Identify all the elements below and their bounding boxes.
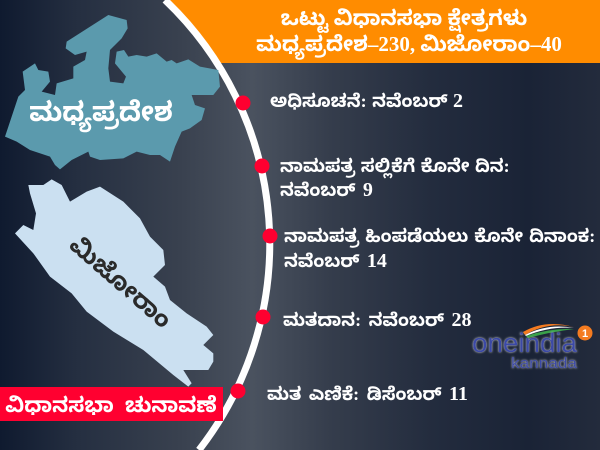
timeline item 3: withdrawal deadline: ನಾಮಪತ್ರ ಹಿಂಪಡೆಯಲು ಕೊನೇ ದಿನಾಂಕ: xyxy=(284,226,595,248)
orange header panel xyxy=(165,0,600,63)
logo: oneindia kannada xyxy=(472,324,592,372)
logo sub-wordmark: kannada xyxy=(511,355,578,372)
header text: ಒಟ್ಟು ವಿಧಾನಸಭಾ ಕ್ಷೇತ್ರಗಳು xyxy=(281,6,527,33)
timeline arc xyxy=(165,0,270,450)
label: Mizoram: ಮಿಜೋರಾಂ xyxy=(64,232,176,334)
timeline item 3: withdrawal deadline xyxy=(262,226,595,272)
timeline item 2: nomination deadline: ನಾಮಪತ್ರ ಸಲ್ಲಿಕೆಗೆ ಕೊನೇ ದಿನ: xyxy=(280,156,510,179)
timeline item 2: nomination deadline: ನವೆಂಬರ್ 9 xyxy=(280,179,373,201)
logo swoosh xyxy=(523,324,574,338)
timeline item 3: withdrawal deadline: ನವೆಂಬರ್ 14 xyxy=(284,250,387,272)
map: Mizoram xyxy=(15,179,213,387)
timeline item 2: nomination deadline xyxy=(254,156,510,201)
label: Madhya Pradesh: ಮಧ್ಯಪ್ರದೇಶ xyxy=(29,97,173,133)
timeline item 5: counting: ಮತ ಎಣಿಕೆ: ಡಿಸೆಂಬರ್ 11 xyxy=(267,383,468,405)
timeline item 4: voting: ಮತದಾನ: ನವೆಂಬರ್ 28 xyxy=(283,309,471,331)
logo badge: 1 xyxy=(582,328,588,340)
red banner: assembly election xyxy=(0,387,223,421)
red banner: assembly election: ವಿಧಾನಸಭಾ ಚುನಾವಣೆ xyxy=(5,393,217,417)
header text xyxy=(256,6,562,60)
header text: ಮಧ್ಯಪ್ರದೇಶ–230, ಮಿಜೋರಾಂ–40 xyxy=(256,32,562,60)
logo wordmark: oneindia xyxy=(472,328,578,358)
map: Madhya Pradesh xyxy=(5,15,220,169)
timeline item 1: notification: ಅಧಿಸೂಚನೆ: ನವೆಂಬರ್ 2 xyxy=(270,90,463,112)
